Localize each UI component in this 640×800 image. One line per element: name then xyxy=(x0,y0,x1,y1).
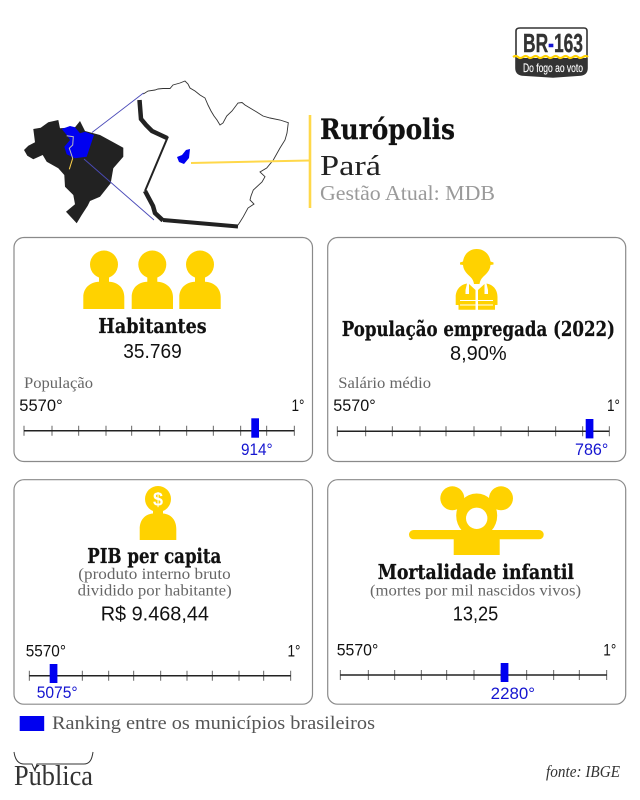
ranking scale: 1° xyxy=(288,643,300,661)
logo: Pública: Pública xyxy=(14,760,93,792)
heading: PIB per capita xyxy=(87,544,221,568)
icon: person with dollar head: $ xyxy=(153,490,163,510)
ranking scale: 5570° xyxy=(26,643,66,661)
ranking scale: 2280° xyxy=(491,685,535,703)
panel: população empregada xyxy=(328,238,626,462)
logo: BR-163 xyxy=(513,28,588,77)
icon: three people xyxy=(83,250,221,309)
ranking scale: 1° xyxy=(607,397,620,415)
ranking scale: 5570° xyxy=(337,641,378,659)
value: 35.769 xyxy=(123,341,182,363)
ranking scale: 5075° xyxy=(37,684,78,702)
ranking scale: 786° xyxy=(575,441,608,459)
value: 8,90% xyxy=(450,343,507,365)
ranking label: Salário médio xyxy=(338,375,431,392)
panel: habitantes xyxy=(14,238,312,462)
subtitle: dividido por habitante) xyxy=(78,583,232,600)
value: 13,25 xyxy=(453,604,498,626)
ranking scale: 1° xyxy=(292,397,304,415)
icon: baby xyxy=(409,486,544,555)
ranking scale xyxy=(19,397,305,459)
map: Pará xyxy=(140,81,288,226)
ranking scale: 914° xyxy=(241,441,273,459)
value: R$ 9.468,44 xyxy=(101,604,209,626)
source: fonte: IBGE xyxy=(546,762,620,781)
heading: Habitantes xyxy=(98,314,207,338)
logo: BR-163: Do fogo ao voto xyxy=(523,61,583,75)
legend: Ranking entre os municípios brasileiros xyxy=(52,713,375,734)
connector lines xyxy=(84,93,154,220)
ranking scale: 1° xyxy=(603,641,616,659)
ranking scale: 5570° xyxy=(333,397,376,415)
title block xyxy=(320,113,495,205)
heading: Mortalidade infantil xyxy=(378,560,574,584)
ranking scale xyxy=(333,397,620,459)
callout line xyxy=(191,115,310,208)
title block: Rurópolis xyxy=(320,113,455,146)
ranking scale xyxy=(337,641,616,703)
subtitle: (produto interno bruto xyxy=(78,566,231,583)
logo: BR-163: BR-163 xyxy=(523,28,583,58)
icon: worker xyxy=(456,249,498,310)
map: Brazil xyxy=(24,120,123,223)
subtitle xyxy=(78,566,232,600)
ranking scale xyxy=(26,643,300,702)
panel: mortalidade infantil xyxy=(328,480,626,704)
title block: Gestão Atual: MDB xyxy=(320,181,495,205)
panel: PIB per capita xyxy=(14,480,312,704)
ranking label: População xyxy=(24,375,93,392)
subtitle: (mortes por mil nascidos vivos) xyxy=(370,583,581,600)
title block: Pará xyxy=(320,150,381,182)
icon: person with dollar head xyxy=(140,486,176,540)
ranking scale: 5570° xyxy=(19,397,63,415)
